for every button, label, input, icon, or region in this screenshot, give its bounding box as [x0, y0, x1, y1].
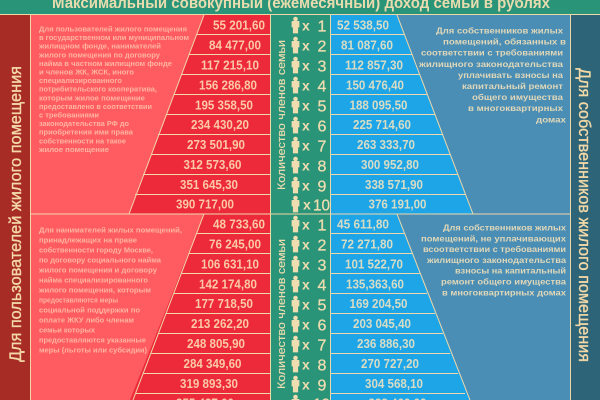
icons and multipliers: lower: x [302, 356, 310, 372]
icons and multipliers: upper: x [302, 178, 310, 194]
icons and multipliers: upper: 7 [318, 138, 326, 156]
icons and multipliers: upper: x [302, 138, 310, 154]
values: lower blue column: 72 271,80 [341, 236, 393, 252]
text block: upper left description: и членов ЖК, ЖСК, иного [39, 70, 134, 76]
text block: upper left description: которым жилое помещение [39, 95, 145, 102]
text block: lower left description: принадлежащих на праве [39, 238, 137, 244]
values: upper blue column: 188 095,50 [350, 98, 408, 112]
text block: lower left description: предоставляются меры [39, 298, 118, 304]
text block: upper right description [418, 26, 566, 124]
values: lower blue column: 169 204,50 [350, 296, 408, 311]
values: upper red column: 312 573,60 [184, 157, 242, 172]
values: lower red column: 106 631,10 [201, 256, 259, 272]
values: upper blue column: 338 571,90 [365, 177, 423, 192]
values: upper blue column: 376 191,00 [368, 196, 426, 212]
left side band: Для пользователей жилого помещения [6, 66, 25, 362]
text block: upper right description: домах [536, 114, 566, 124]
icons and multipliers: lower: 1 [318, 218, 326, 234]
icons and multipliers: lower: 4 [318, 278, 326, 294]
values: lower red column: 213 262,20 [191, 316, 249, 331]
text block: upper left description: жилое помещение [38, 147, 109, 154]
values: upper red column: 55 201,60 [213, 18, 265, 32]
icons and multipliers: lower: 7 [318, 338, 326, 354]
text block: lower left description: Для нанимателей жилых помещений, [39, 226, 182, 234]
icons and multipliers: lower: 5 [318, 298, 326, 314]
values: upper blue column: 52 538,50 [337, 18, 389, 32]
text block: upper left description: законодательства РФ до [39, 121, 129, 128]
text block: upper left description: с требованиями [39, 112, 99, 120]
icons and multipliers: upper: 8 [318, 158, 326, 176]
values: lower red column: 319 893,30 [180, 376, 238, 391]
text block: lower left description: по договору социального найма [39, 256, 161, 264]
icons and multipliers: lower: x [302, 296, 310, 312]
values: lower blue column: 45 611,80 [337, 216, 389, 232]
icons and multipliers: upper: x [303, 196, 311, 212]
axis label: family members lower: Количество членов семьи [276, 239, 288, 389]
icons and multipliers: upper: x [302, 98, 310, 114]
values: upper red column: 390 717,00 [176, 196, 234, 212]
icons and multipliers: upper: x [302, 118, 310, 134]
text block: upper right description: жилищного законодательства [418, 59, 563, 69]
text block: upper right description: общего имущества [472, 92, 563, 102]
values: upper blue column [337, 18, 426, 212]
values: upper blue column: 300 952,80 [361, 157, 419, 172]
right side band: Для собственников жилого помещения [575, 68, 594, 362]
left side band [0, 15, 30, 400]
values: lower blue column: 101 522,70 [345, 256, 403, 272]
icons and multipliers: lower: x [302, 316, 310, 332]
values: upper blue column: 81 087,60 [341, 38, 393, 52]
icons and multipliers: upper: x [302, 78, 310, 94]
text block: upper left description: потребительского кооператива, [39, 86, 157, 94]
icons and multipliers: upper: x [302, 158, 310, 174]
values: upper blue column: 225 714,60 [353, 117, 411, 132]
values: lower red column: 284 349,60 [184, 356, 242, 371]
text block: lower right description: Для собственников жилых [443, 222, 566, 232]
right side band [571, 15, 600, 400]
values: lower blue column [337, 216, 426, 400]
values: upper blue column: 263 333,70 [357, 137, 415, 152]
icons and multipliers: upper: 6 [318, 118, 326, 136]
icons and multipliers: lower: x [302, 216, 310, 232]
values: lower blue column: 304 568,10 [365, 376, 423, 391]
values: lower blue column: 270 727,20 [361, 356, 419, 371]
text block: upper right description: Для собственников жилых [436, 26, 563, 36]
text block: lower left description: социальной поддержки по [39, 306, 140, 314]
values: lower red column: 248 805,90 [187, 336, 245, 351]
text block: upper left description: предоставлено в соответствии [39, 104, 152, 111]
text block: upper left description: жилого помещения по договору [38, 52, 160, 59]
icons and multipliers: lower: x [302, 256, 310, 272]
icons and multipliers: lower: 6 [318, 318, 326, 334]
text block: lower left description: жилого помещения, которым [38, 288, 151, 294]
values: lower red column: 177 718,50 [195, 296, 253, 311]
values: upper red column: 195 358,50 [195, 98, 253, 112]
icons and multipliers: lower: x [302, 336, 310, 352]
values: lower red column: 142 174,80 [199, 276, 257, 292]
text block: lower right description: в многоквартирных домах [442, 287, 566, 297]
text block: upper left description: найма в частном жилищном фонде [39, 60, 172, 68]
icons and multipliers: lower: 9 [318, 378, 326, 394]
text block: upper left description [38, 26, 189, 154]
icons and multipliers: upper: 4 [318, 78, 326, 96]
text block: upper left description: жилищном фонде, нанимателей [38, 43, 161, 51]
icons and multipliers: lower: 2 [318, 238, 326, 254]
icons and multipliers: upper: x [302, 18, 310, 34]
icons and multipliers: upper: 2 [318, 38, 326, 56]
text block: upper right description: помещений, обязанных в [443, 37, 566, 47]
text block: lower right description: жилищного законодательства [426, 255, 566, 265]
text block: lower right description: всоответствии с требованиями [423, 244, 566, 254]
text block: lower left description: собственности городу Москве, [39, 246, 153, 254]
values: lower red column: 48 733,60 [213, 216, 265, 232]
values: lower blue column: 135,363,60 [346, 276, 404, 292]
values: upper red column: 351 645,30 [180, 177, 238, 192]
text block: upper left description: приобретения ими права [39, 129, 133, 137]
text block: upper left description: Для пользователей жилого помещения [39, 26, 187, 34]
values: upper red column: 117 215,10 [201, 58, 259, 72]
text block: lower left description: семьи которых [39, 328, 95, 334]
text block: lower right description: помещений, не уплачивающих [421, 233, 566, 243]
icons and multipliers: lower [292, 216, 330, 400]
values: lower red column: 76 245,00 [209, 236, 261, 252]
icons and multipliers: upper: 1 [318, 18, 326, 36]
values: lower red column [176, 216, 265, 400]
values: upper blue column: 150 476,40 [346, 78, 404, 92]
text block: upper right description: капитальный ремонт [462, 81, 563, 91]
text block: upper left description: в государственном или муниципальном [39, 35, 189, 42]
values: upper red column: 156 286,80 [199, 78, 257, 92]
text block: upper right description: соответствии с требованиями [421, 48, 563, 58]
values: lower blue column: 236 886,30 [357, 336, 415, 351]
axis label: family members upper: Количество членов семьи [276, 40, 288, 190]
icons and multipliers: upper: 5 [318, 98, 326, 116]
icons and multipliers: upper: 3 [318, 58, 326, 76]
text block: lower left description: предоставляются указанные [39, 338, 146, 344]
values: upper blue column: 112 857,30 [345, 58, 403, 72]
text block: lower right description: взносы на капитальный [455, 266, 566, 276]
values: upper red column: 273 501,90 [187, 137, 245, 152]
icons and multipliers: upper: x [302, 38, 310, 54]
text block: lower left description: оплате ЖКУ либо членам [39, 316, 134, 324]
icons and multipliers: upper: x [302, 58, 310, 74]
values: lower blue column: 203 045,40 [353, 316, 411, 331]
text block: lower left description: жилого помещения и договору [38, 268, 157, 274]
values: upper red column: 84 477,00 [209, 38, 261, 52]
text block: upper right description: уплачивать взносы на [458, 70, 563, 80]
text block: lower right description [421, 222, 566, 297]
icons and multipliers: upper: 10 [313, 198, 330, 214]
text block: upper left description: специализированного [39, 78, 122, 85]
icons and multipliers: upper: 9 [318, 178, 326, 196]
text block: lower right description: ремонт общего имущества [441, 276, 566, 286]
text block: lower left description: меры (льготы или субсидии) [39, 346, 147, 354]
text block: upper right description: в многоквартирных [468, 103, 563, 113]
icons and multipliers: lower: x [302, 376, 310, 392]
icons and multipliers: upper [292, 17, 330, 215]
text block: lower left description: найма специализированного [39, 276, 148, 284]
icons and multipliers: lower: 3 [318, 258, 326, 274]
icons and multipliers: lower: x [302, 276, 310, 292]
icons and multipliers: lower: 8 [318, 358, 326, 374]
text block: lower left description [38, 226, 182, 354]
icons and multipliers: lower: x [302, 236, 310, 252]
values: upper red column: 234 430,20 [191, 117, 249, 132]
text block: upper left description: собственности на такое [39, 137, 126, 145]
values: upper red column [176, 18, 265, 212]
